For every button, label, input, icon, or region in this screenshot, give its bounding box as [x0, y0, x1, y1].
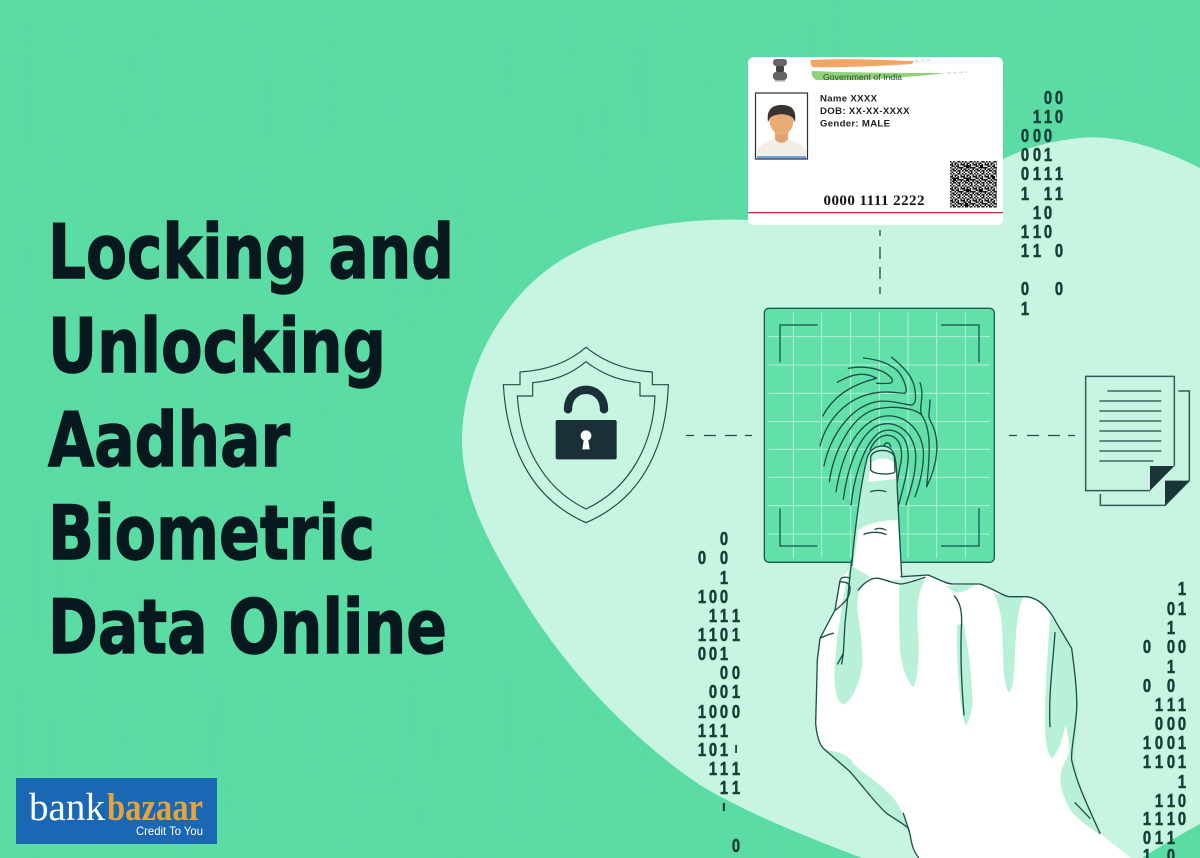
binary digits: bottom right: 011 [1143, 827, 1175, 848]
binary digits: bottom right: 1 [1167, 617, 1175, 638]
binary digits: bottom centre: 1 [720, 567, 728, 588]
binary digits: bottom centre: 00 [720, 662, 740, 683]
binary digits: bottom right [1143, 578, 1186, 858]
binary digits: bottom right: 1 [1178, 771, 1186, 792]
binary digits: bottom right: 000 [1143, 636, 1186, 657]
binary digits: bottom right: 1001 [1143, 732, 1186, 753]
binary digits: bottom centre: 111 [709, 758, 740, 779]
dashed connector: card to scanner [879, 230, 881, 294]
binary digits: bottom right: 1101 [1143, 751, 1186, 772]
binary digits: top right: 110 [1021, 221, 1052, 242]
binary digits: top right: 10 [1033, 202, 1052, 223]
Aadhaar ID card [748, 57, 1003, 225]
palm and fingers [816, 560, 1133, 858]
title: Biometric [48, 489, 375, 577]
binary digits: bottom right: 1 [1167, 656, 1175, 677]
binary digits: bottom right: 01 [1167, 598, 1186, 619]
binary digits: bottom centre [698, 528, 740, 856]
logo: bankbazaar: bank [29, 786, 105, 829]
binary digits: bottom centre: 0 [732, 835, 740, 856]
dashed connector: scanner to document [1009, 434, 1075, 436]
binary digits: bottom centre: 100 [698, 586, 728, 607]
card holder details: DOB: XX-XX-XXXX [820, 106, 910, 117]
title: Aadhar [48, 396, 290, 484]
title [48, 208, 454, 671]
card tricolour swooshes [810, 59, 967, 80]
index finger [851, 446, 902, 580]
binary digits: top right: 1 [1021, 298, 1029, 319]
card holder details [820, 94, 910, 130]
binary digits: top right: 000 [1021, 125, 1052, 146]
binary digits: top right: 0111 [1021, 163, 1063, 184]
hand shadows [825, 565, 1100, 835]
card heading: Government of India [823, 72, 902, 82]
fingerprint scanner panel [764, 308, 994, 562]
binary digits: top right: 110 [1021, 240, 1063, 261]
binary digits: bottom centre: 111 [709, 605, 740, 626]
card number: 0000 1111 2222 [824, 193, 924, 209]
binary digits: bottom right: 1110 [1143, 808, 1186, 829]
binary digits: top right: 00 [1044, 87, 1063, 108]
card red line [748, 212, 1003, 213]
binary digits: bottom centre: 101 [698, 739, 728, 760]
card portrait [756, 93, 808, 159]
binary digits: top right: 111 [1021, 183, 1063, 204]
dashed connector: shield to scanner [686, 434, 752, 436]
binary digits: bottom centre: 1000 [698, 701, 740, 722]
binary digits: top right [1021, 87, 1063, 319]
binary digits: bottom right: 111 [1155, 694, 1186, 715]
hand outlines [816, 560, 1100, 857]
card emblem [773, 59, 787, 82]
logo: bankbazaar [16, 778, 217, 844]
binary digits: bottom right: 110 [1155, 790, 1186, 811]
binary digits: bottom right: 00 [1143, 675, 1175, 696]
card holder details: Gender: MALE [820, 118, 891, 130]
binary digits: bottom centre: 111 [698, 720, 728, 741]
binary digits: bottom centre: 11 [720, 777, 740, 798]
title: Unlocking [48, 302, 386, 390]
scanner corner brackets [780, 325, 979, 546]
binary digits: bottom centre: 00 [698, 547, 728, 568]
padlock [556, 390, 617, 459]
title: Locking and [48, 208, 454, 296]
shield with padlock icon [503, 347, 668, 523]
hand pressing scanner [816, 446, 1133, 858]
binary digits: top right: 00 [1021, 278, 1063, 299]
document icon [1086, 376, 1189, 505]
binary digits: bottom centre: 001 [698, 643, 728, 664]
QR code [950, 161, 997, 208]
binary digits: top right: 001 [1021, 144, 1052, 165]
fingerprint ridges [820, 357, 937, 510]
background blob [462, 137, 1200, 858]
card holder details: Name XXXX [820, 94, 878, 104]
binary digits: bottom centre: 1101 [698, 624, 740, 645]
binary digits: bottom centre: 001 [709, 681, 740, 702]
binary digits: top right: 110 [1033, 106, 1063, 127]
title: Data Online [48, 583, 447, 671]
binary digits: bottom centre: 0 [720, 528, 728, 549]
logo: bankbazaar: bazaar [107, 786, 203, 829]
logo: bankbazaar: Credit To You [136, 824, 203, 838]
binary digits: bottom right: 000 [1155, 713, 1186, 734]
binary digits: bottom right: 1 [1178, 578, 1186, 599]
